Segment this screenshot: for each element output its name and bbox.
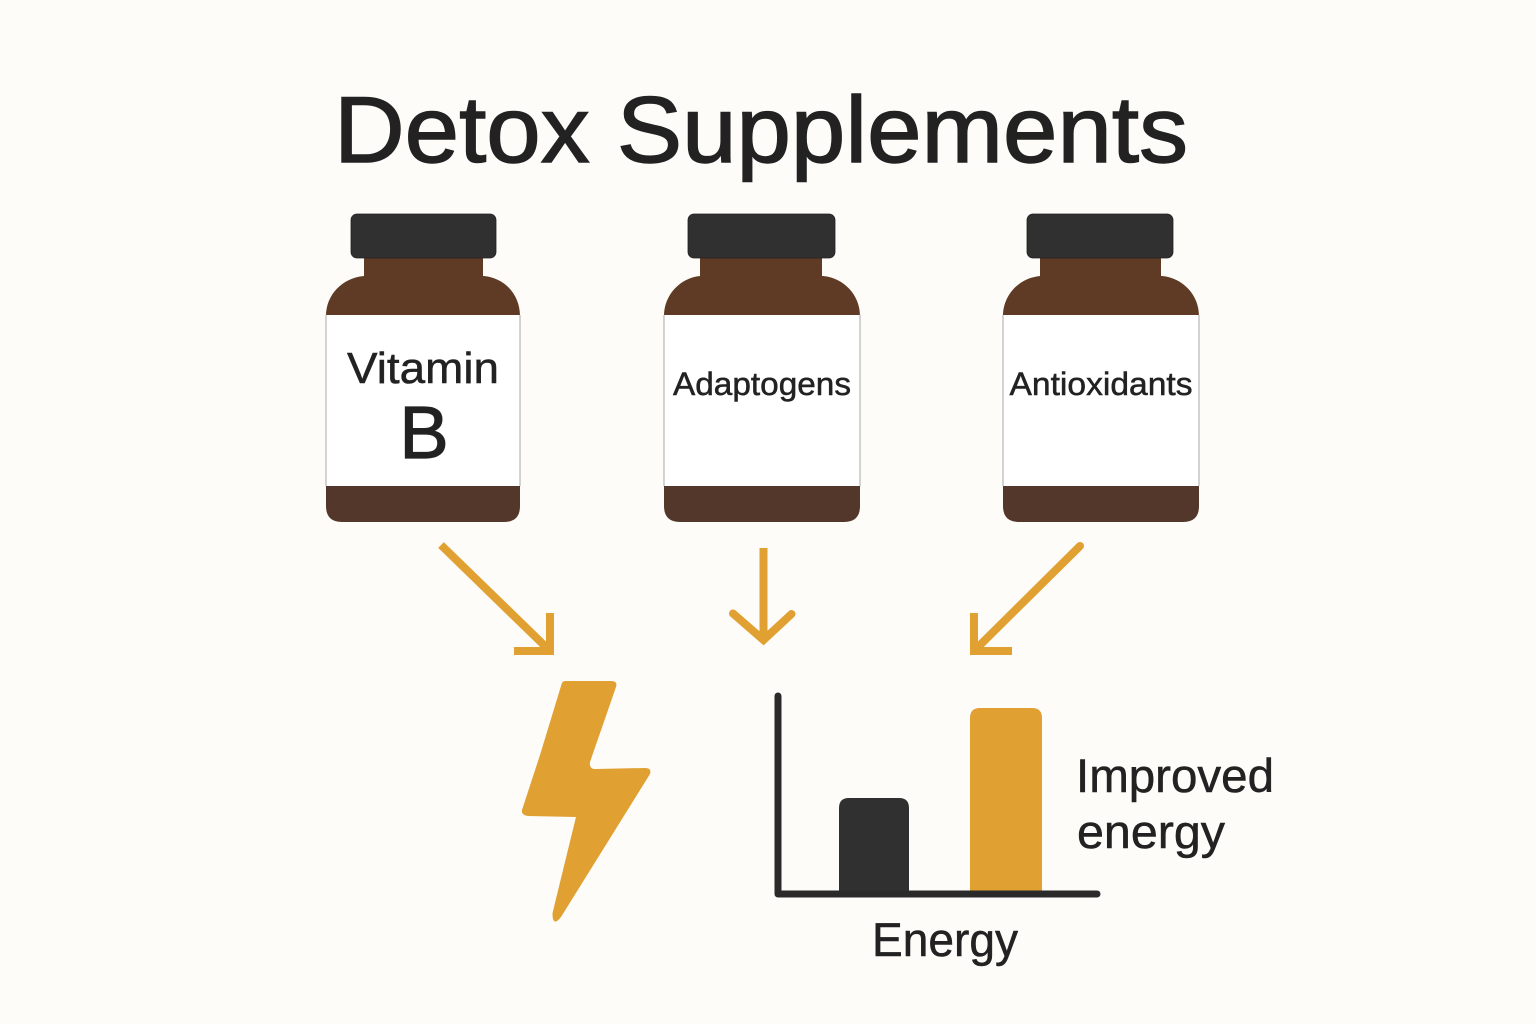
bar: improved xyxy=(970,708,1042,892)
arrow: Vitamin B to lightning xyxy=(441,545,550,651)
axis label: Energy: Energy xyxy=(872,913,1018,966)
bottle: Antioxidants xyxy=(1003,214,1199,522)
arrow: Antioxidants to chart xyxy=(974,546,1080,651)
icon: lightning bolt xyxy=(522,681,650,922)
bar chart xyxy=(778,696,1097,966)
bottle: Adaptogens xyxy=(664,214,860,522)
arrow: Adaptogens down xyxy=(733,548,792,640)
bar: before xyxy=(839,798,909,892)
bottle: Vitamin B xyxy=(326,214,520,522)
chart axes xyxy=(778,696,1097,894)
callout: Improved energy xyxy=(1076,749,1274,858)
title: Detox Supplements xyxy=(334,77,1188,182)
label: Adaptogens: Adaptogens xyxy=(673,366,851,402)
callout: Improved energy: energy xyxy=(1077,805,1226,858)
label: B: B xyxy=(399,391,449,474)
label: Antioxidants: Antioxidants xyxy=(1010,366,1192,402)
callout: Improved energy: Improved xyxy=(1076,749,1274,802)
label: Vitamin: Vitamin xyxy=(347,344,499,393)
